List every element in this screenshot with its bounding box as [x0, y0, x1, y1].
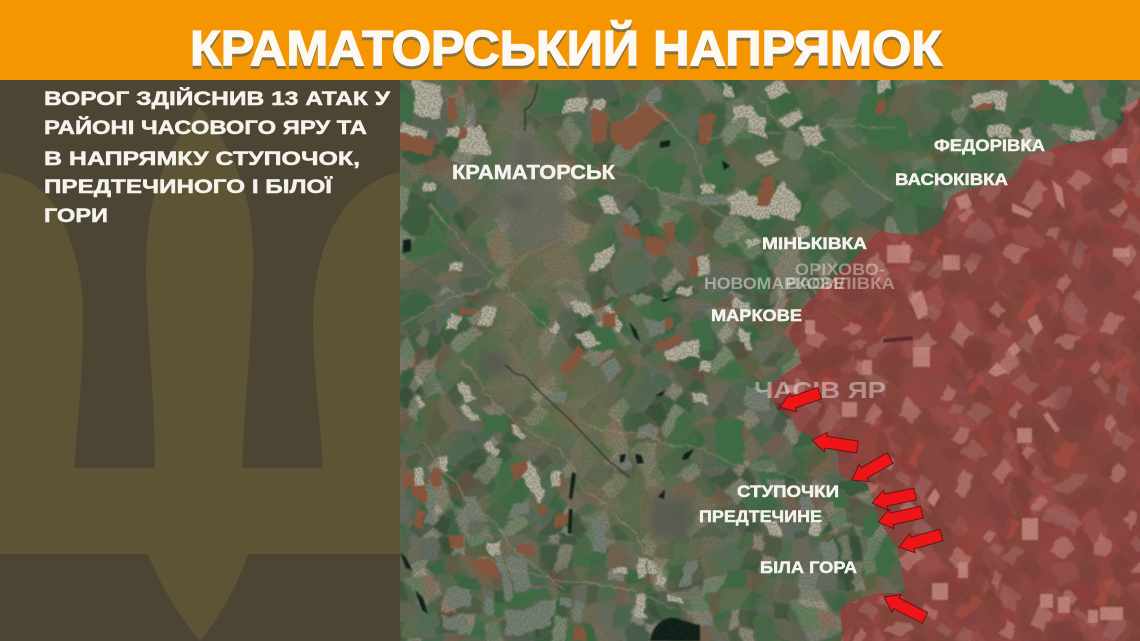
header banner — [0, 0, 1140, 80]
red zone: dark fields — [960, 220, 1100, 583]
red zone: light fields — [785, 148, 1130, 623]
arrow: towards Predtechyne — [877, 506, 924, 530]
place label: Bila Hora: БІЛА ГОРА — [760, 558, 857, 577]
summary text block: РАЙОНІ ЧАСОВОГО ЯРУ ТА — [44, 117, 367, 139]
left panel — [0, 80, 400, 641]
place label: Minkivka: МІНЬКІВКА — [762, 234, 867, 253]
green fields: north-east — [640, 90, 1040, 240]
roads and field tracks — [400, 100, 900, 620]
farmland: green fields — [400, 85, 1115, 613]
place label: Fedorivka: ФЕДОРІВКА — [934, 136, 1045, 155]
summary text block: В НАПРЯМКУ СТУПОЧОК, — [44, 149, 360, 170]
tan ridge: central band — [470, 120, 720, 570]
farmland patchwork: south — [400, 525, 884, 641]
place label: Orikhovo-Vasylivka: ВАСИЛІВКА — [786, 274, 895, 293]
arrow: towards Bila Hora — [883, 594, 928, 624]
farmland patchwork: centre — [400, 290, 889, 546]
summary text block: ПРЕДТЕЧИНОГО І БІЛОЇ — [44, 177, 333, 198]
place label: Chasiv Yar: ЧАСІВ ЯР — [754, 377, 886, 403]
farmland patchwork: north — [400, 80, 1140, 306]
arrow: Stupochky east — [871, 488, 917, 510]
place label: Orikhovo-Vasylivka: ОРІХОВО- — [795, 260, 885, 279]
farmland: grey fields — [427, 90, 838, 633]
summary text block: ВОРОГ ЗДІЙСНИВ 13 АТАК У — [44, 88, 390, 110]
settlement: Kramatorsk — [497, 130, 573, 251]
occupied territory: red zone — [767, 97, 1140, 641]
title: КРАМАТОРСЬКИЙ НАПРЯМОК — [190, 21, 942, 76]
satellite map — [370, 50, 1140, 641]
farmland patchwork: overlay — [370, 50, 1140, 641]
red zone: field texture — [783, 98, 1140, 641]
attack arrows — [777, 384, 944, 627]
place label: Kramatorsk: КРАМАТОРСЬК — [452, 162, 616, 184]
place label: Novomarkove: НОВОМАРКОВЕ — [704, 274, 845, 293]
place label: Vasiukivka: ВАСЮКІВКА — [895, 170, 1008, 189]
farmland: brown and orange fields — [400, 90, 998, 641]
trident emblem — [0, 107, 400, 641]
summary text block — [44, 88, 390, 227]
place label: Orikhovo-Vasylivka — [787, 264, 894, 289]
arrow: south of Chasiv Yar — [811, 432, 859, 454]
farmland patchwork: east — [880, 180, 1140, 641]
place label: Stupochky: СТУПОЧКИ — [737, 482, 839, 501]
arrow: Chasiv Yar — [780, 386, 822, 412]
arrow: north of Bila Hora — [898, 528, 944, 554]
arrow: towards Stupochky — [851, 452, 894, 482]
red zone: dark trench — [883, 336, 913, 343]
settlements: urban greys — [482, 140, 692, 537]
summary text block: ГОРИ — [44, 206, 108, 227]
place label: Markove: МАРКОВЕ — [711, 306, 802, 325]
ponds and rivers — [400, 83, 788, 641]
place label: Predtechyne: ПРЕДТЕЧИНЕ — [699, 507, 822, 526]
farmland: white fields — [406, 80, 1090, 624]
